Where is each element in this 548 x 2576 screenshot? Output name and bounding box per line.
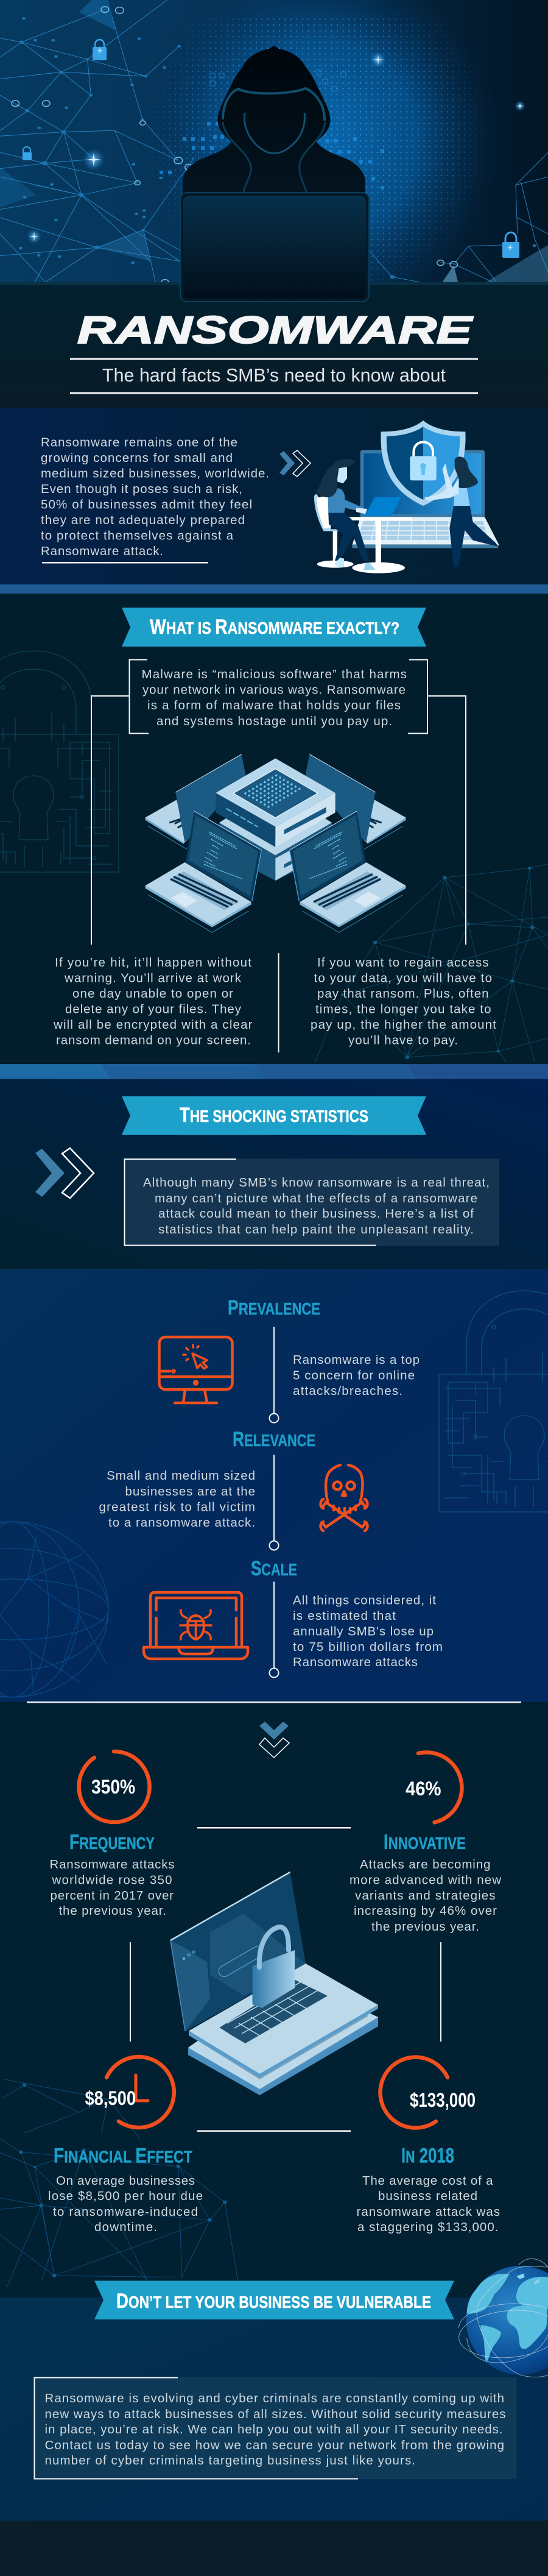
definition text: your network in various ways. Ransomware bbox=[142, 683, 406, 697]
definition text: and systems hostage until you pay up. bbox=[156, 714, 392, 728]
title rule bottom bbox=[70, 392, 478, 394]
in 2018 text: The average cost of a bbox=[362, 2174, 493, 2188]
vertical lines bbox=[130, 1942, 441, 2042]
panel: prevalence relevance scale bbox=[0, 1269, 548, 1702]
title: RANSOMWARE bbox=[77, 309, 474, 352]
subtitle: The hard facts SMB’s need to know about bbox=[102, 364, 446, 386]
banner: what is ransomware exactly bbox=[122, 608, 426, 647]
scale text: is estimated that bbox=[293, 1609, 396, 1623]
footer band bbox=[0, 2521, 548, 2576]
left explanation text bbox=[53, 956, 253, 1047]
heading: frequency: FREQUENCY bbox=[69, 1831, 155, 1854]
heading: innovative: INNOVATIVE bbox=[384, 1831, 466, 1854]
network background bbox=[315, 864, 548, 1063]
panel: intro bbox=[0, 408, 548, 584]
stat: in 2018 ring: $133,000 bbox=[410, 2089, 476, 2111]
wire sphere background bbox=[0, 1522, 108, 1697]
hacker laptop bbox=[180, 193, 369, 302]
financial effect text bbox=[48, 2174, 203, 2234]
icon: double chevron bbox=[35, 1148, 94, 1198]
relevance text: Small and medium sized bbox=[107, 1469, 255, 1483]
sparkles bbox=[27, 45, 525, 253]
network background bottom left bbox=[0, 2079, 237, 2287]
timeline 2 bbox=[269, 1455, 279, 1550]
left explanation text: If you’re hit, it’ll happen without bbox=[55, 956, 251, 970]
hero network lines bbox=[0, 0, 548, 285]
connector and bracket frame bbox=[91, 659, 466, 945]
financial effect text: to ransomware-induced bbox=[53, 2205, 198, 2219]
financial effect text: lose $8,500 per hour due bbox=[48, 2189, 203, 2203]
intro text: growing concerns for small and bbox=[41, 451, 233, 465]
frequency text: Ransomware attacks bbox=[50, 1857, 174, 1872]
right explanation text: pay up, the higher the amount bbox=[311, 1018, 496, 1032]
right explanation text: to your data, you will have to bbox=[314, 971, 492, 985]
intro text: Ransomware remains one of the bbox=[41, 435, 237, 450]
stat: frequency ring: 350% bbox=[91, 1776, 135, 1798]
financial effect text: downtime. bbox=[94, 2220, 157, 2234]
innovative text: Attacks are becoming bbox=[360, 1857, 491, 1872]
circuit padlock background right bbox=[439, 1291, 548, 1512]
closing callout box bbox=[34, 2377, 516, 2479]
panel: what is ransomware bbox=[0, 594, 548, 1064]
scale text: annually SMB's lose up bbox=[293, 1625, 434, 1638]
intro text: 50% of businesses admit they feel bbox=[41, 497, 252, 512]
scale text bbox=[293, 1593, 443, 1669]
in 2018 text: business related bbox=[378, 2189, 477, 2203]
hero background panel bbox=[0, 0, 488, 282]
left explanation text: ransom demand on your screen. bbox=[56, 1034, 251, 1047]
banner: dont let your business be vulnerable: DON’T LET YOUR BUSINESS BE VULNERABLE bbox=[116, 2290, 431, 2313]
scale text: Ransomware attacks bbox=[293, 1655, 418, 1669]
illustration: server and laptops bbox=[145, 754, 406, 932]
relevance text bbox=[99, 1469, 255, 1530]
left explanation text: one day unable to open or bbox=[72, 987, 233, 1001]
desk and title panel background bbox=[0, 282, 548, 408]
heading: financial effect: FINANCIAL EFFECT bbox=[54, 2144, 192, 2167]
icon: skull and crossbones bbox=[320, 1465, 368, 1531]
right explanation text: you’ll have to pay. bbox=[348, 1034, 458, 1047]
rule bottom bbox=[197, 2131, 351, 2132]
icon: monitor with cursor bbox=[160, 1337, 233, 1403]
circuit padlock background bbox=[0, 651, 119, 872]
innovative text: variants and strategies bbox=[355, 1889, 496, 1903]
prevalence text: 5 concern for online bbox=[293, 1369, 415, 1382]
stat: innovative ring bbox=[406, 1752, 462, 1822]
panel: shocking statistics intro bbox=[0, 1079, 548, 1269]
closing callout box: Ransomware is evolving and cyber criminals are constantly coming up with bbox=[45, 2391, 504, 2405]
panel: stats ring section bbox=[0, 1701, 548, 2297]
left explanation text: warning. You’ll arrive at work bbox=[64, 971, 242, 985]
innovative text: the previous year. bbox=[371, 1920, 479, 1934]
right explanation text: If you want to regain access bbox=[317, 956, 488, 970]
icon: padlock left bbox=[23, 147, 32, 160]
closing callout box: Contact us today to see how we can secure your network from the growing bbox=[45, 2438, 504, 2452]
icon: laptop with bug bbox=[144, 1592, 248, 1659]
definition text: Malware is “malicious software” that harms bbox=[141, 667, 407, 681]
intro text: to protect themselves against a bbox=[41, 529, 234, 542]
stat: in 2018 ring bbox=[381, 2057, 476, 2128]
illustration: people securing laptop bbox=[314, 420, 499, 573]
intro text: Even though it poses such a risk, bbox=[41, 482, 242, 496]
stat: financial effect ring bbox=[85, 2057, 174, 2127]
in 2018 text: ransomware attack was bbox=[357, 2205, 500, 2219]
prevalence text bbox=[293, 1353, 420, 1398]
icon: down chevrons bbox=[259, 1722, 289, 1758]
relevance text: to a ransomware attack. bbox=[108, 1516, 255, 1530]
closing callout box: new ways to attack businesses of all sizes. Without solid security measures bbox=[45, 2407, 505, 2421]
icon: padlock top left bbox=[93, 40, 107, 60]
timeline 3 bbox=[269, 1582, 279, 1677]
intro text bbox=[41, 435, 269, 558]
banner: the shocking statistics: THE SHOCKING STATISTICS bbox=[180, 1104, 368, 1127]
heading: in 2018: IN 2018 bbox=[401, 2144, 454, 2167]
frequency text bbox=[50, 1857, 174, 1918]
section band 2 bbox=[0, 1064, 548, 1079]
callout box bbox=[124, 1158, 499, 1246]
innovative text bbox=[350, 1857, 501, 1934]
callout box: attack could mean to their business. Here’s a list of bbox=[158, 1207, 474, 1221]
stat: frequency ring bbox=[79, 1751, 150, 1822]
definition text: is a form of malware that holds your files bbox=[147, 698, 401, 712]
rule top bbox=[197, 1827, 351, 1828]
vertical divider bbox=[278, 953, 279, 1052]
banner: the shocking statistics bbox=[122, 1096, 426, 1135]
closing callout box: number of cyber criminals targeting business just like yours. bbox=[45, 2454, 415, 2468]
intro text: they are not adequately prepared bbox=[41, 513, 245, 527]
prevalence text: attacks/breaches. bbox=[293, 1384, 402, 1398]
heading: prevalence: PREVALENCE bbox=[228, 1296, 320, 1319]
relevance text: greatest risk to fall victim bbox=[99, 1500, 255, 1514]
icon: padlock right bbox=[502, 233, 519, 258]
frequency text: worldwide rose 350 bbox=[51, 1873, 172, 1887]
in 2018 text bbox=[357, 2174, 500, 2234]
intro text: medium sized businesses, worldwide. bbox=[41, 467, 269, 480]
heading: relevance: RELEVANCE bbox=[233, 1428, 315, 1451]
panel: closing bbox=[0, 2258, 548, 2521]
right explanation text: times, the longer you take to bbox=[315, 1002, 491, 1017]
section band 1 bbox=[0, 584, 548, 594]
scale text: All things considered, it bbox=[293, 1593, 436, 1608]
callout box: many can’t picture what the effects of a ransomware bbox=[155, 1191, 477, 1205]
callout box: statistics that can help paint the unpleasant reality. bbox=[158, 1222, 474, 1237]
definition text bbox=[141, 667, 407, 728]
title rule top bbox=[70, 358, 478, 360]
illustration: laptop with padlock bbox=[170, 1872, 378, 2095]
right explanation text: pay that ransom. Plus, often bbox=[317, 987, 488, 1001]
closing callout box: in place, you’re at risk. We can help you out with all your IT security needs. bbox=[45, 2422, 503, 2436]
icon: chevrons bbox=[279, 450, 311, 477]
innovative text: more advanced with new bbox=[350, 1873, 501, 1887]
frequency text: the previous year. bbox=[58, 1904, 166, 1918]
hacker silhouette bbox=[183, 46, 365, 195]
left explanation text: delete any of your files. They bbox=[65, 1002, 242, 1017]
heading: scale: SCALE bbox=[251, 1557, 297, 1580]
frequency text: percent in 2017 over bbox=[50, 1889, 174, 1903]
innovative text: increasing by 46% over bbox=[354, 1904, 497, 1918]
prevalence text: Ransomware is a top bbox=[293, 1353, 420, 1367]
stat: innovative ring: 46% bbox=[406, 1778, 441, 1800]
intro underline bbox=[42, 562, 208, 563]
stat: financial effect ring: $8,500 bbox=[85, 2087, 136, 2109]
in 2018 text: a staggering $133,000. bbox=[357, 2220, 498, 2234]
callout box: Although many SMB’s know ransomware is a real threat, bbox=[143, 1176, 490, 1190]
right explanation text bbox=[311, 956, 496, 1047]
scale text: to 75 billion dollars from bbox=[293, 1640, 443, 1654]
icon: globe bbox=[457, 2258, 548, 2377]
intro text: Ransomware attack. bbox=[41, 544, 163, 558]
banner: dont let your business be vulnerable bbox=[94, 2280, 454, 2319]
banner: what is ransomware exactly: WHAT IS RANSOMWARE EXACTLY? bbox=[150, 616, 399, 639]
timeline 1 bbox=[269, 1327, 279, 1422]
financial effect text: On average businesses bbox=[56, 2174, 195, 2188]
relevance text: businesses are at the bbox=[125, 1485, 255, 1499]
left explanation text: will all be encrypted with a clear bbox=[53, 1018, 253, 1032]
